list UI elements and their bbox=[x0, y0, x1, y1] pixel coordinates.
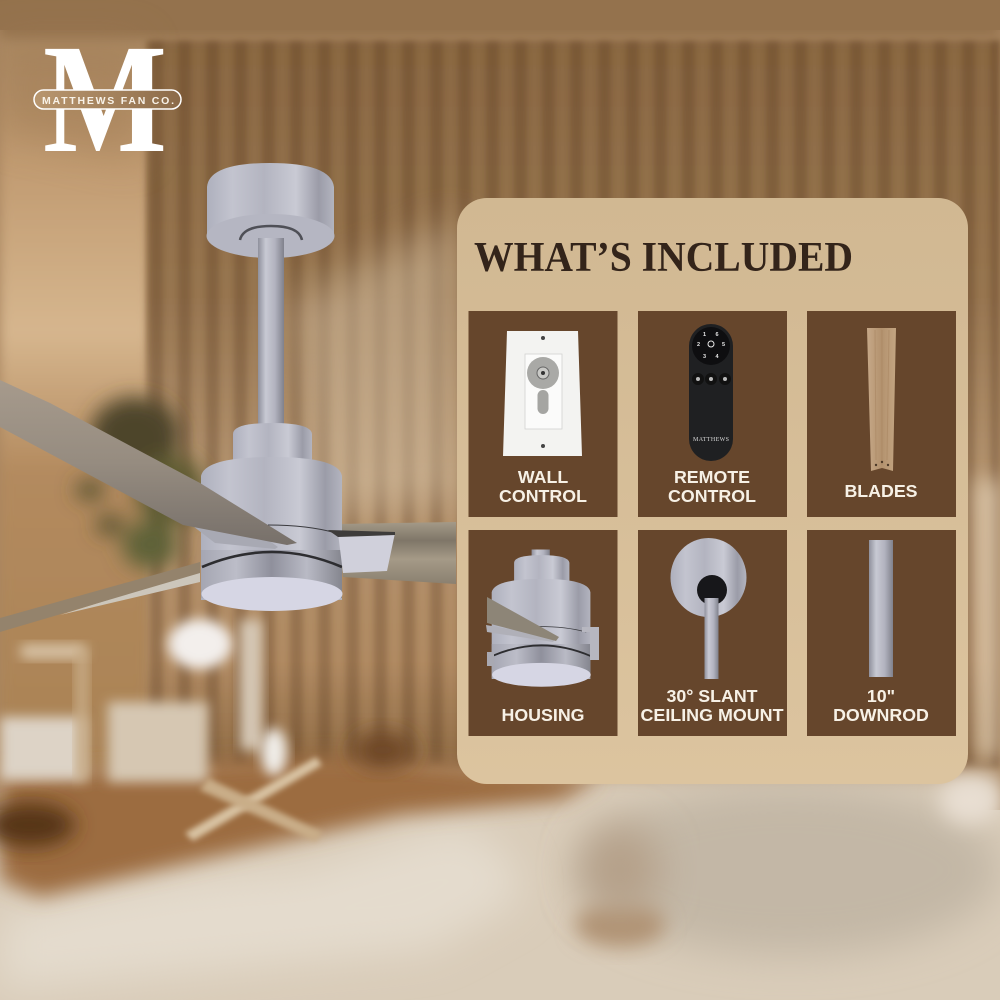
icon: remote: 6 bbox=[715, 332, 719, 338]
logo: Matthews Fan Co.: MATTHEWS FAN CO. bbox=[42, 95, 174, 107]
card: remote control bbox=[638, 311, 787, 517]
icon: remote: 3 bbox=[703, 354, 706, 360]
fan housing bbox=[201, 415, 342, 611]
label: HOUSING bbox=[502, 705, 584, 725]
heading: WHAT’S INCLUDED bbox=[474, 235, 853, 281]
icon: remote: 4 bbox=[715, 354, 719, 360]
background: chair and lamp bbox=[0, 619, 322, 842]
label: CONTROL bbox=[668, 486, 756, 506]
card: ceiling mount bbox=[638, 530, 787, 736]
fan brackets bbox=[185, 520, 395, 573]
icon: remote: 1 bbox=[703, 332, 706, 338]
label: REMOTE bbox=[674, 467, 750, 487]
background: floor bbox=[0, 732, 1000, 1000]
icon: remote: 5 bbox=[722, 342, 725, 348]
fan lower-left blade bbox=[0, 562, 200, 632]
fan right blade bbox=[335, 522, 456, 584]
icon: wall control bbox=[503, 331, 582, 456]
card: downrod bbox=[807, 530, 956, 736]
card: housing bbox=[468, 530, 618, 736]
label: CEILING MOUNT bbox=[640, 705, 784, 725]
panel: what's included bbox=[457, 198, 968, 784]
icon: slant ceiling mount bbox=[670, 538, 746, 679]
icon: remote: MATTHEWS bbox=[693, 437, 729, 443]
icon: housing bbox=[486, 550, 599, 687]
card: wall control bbox=[468, 311, 618, 517]
background: plant bbox=[76, 397, 205, 569]
logo: Matthews Fan Co.: M bbox=[43, 12, 167, 185]
card: blades bbox=[807, 311, 956, 517]
label: WALL bbox=[518, 467, 568, 487]
icon: remote: 2 bbox=[697, 342, 700, 348]
icon: downrod bbox=[869, 540, 893, 677]
label: DOWNROD bbox=[833, 705, 929, 725]
fan canopy bbox=[206, 163, 334, 258]
label: BLADES bbox=[844, 481, 918, 501]
ceiling fan bbox=[0, 163, 456, 632]
icon: remote bbox=[689, 324, 733, 461]
label: CONTROL bbox=[499, 486, 587, 506]
fan upper-left blade bbox=[0, 380, 297, 545]
fan downrod bbox=[258, 238, 284, 425]
label: 10" bbox=[867, 686, 895, 706]
icon: blade bbox=[867, 328, 896, 471]
label: 30° SLANT bbox=[666, 686, 758, 706]
